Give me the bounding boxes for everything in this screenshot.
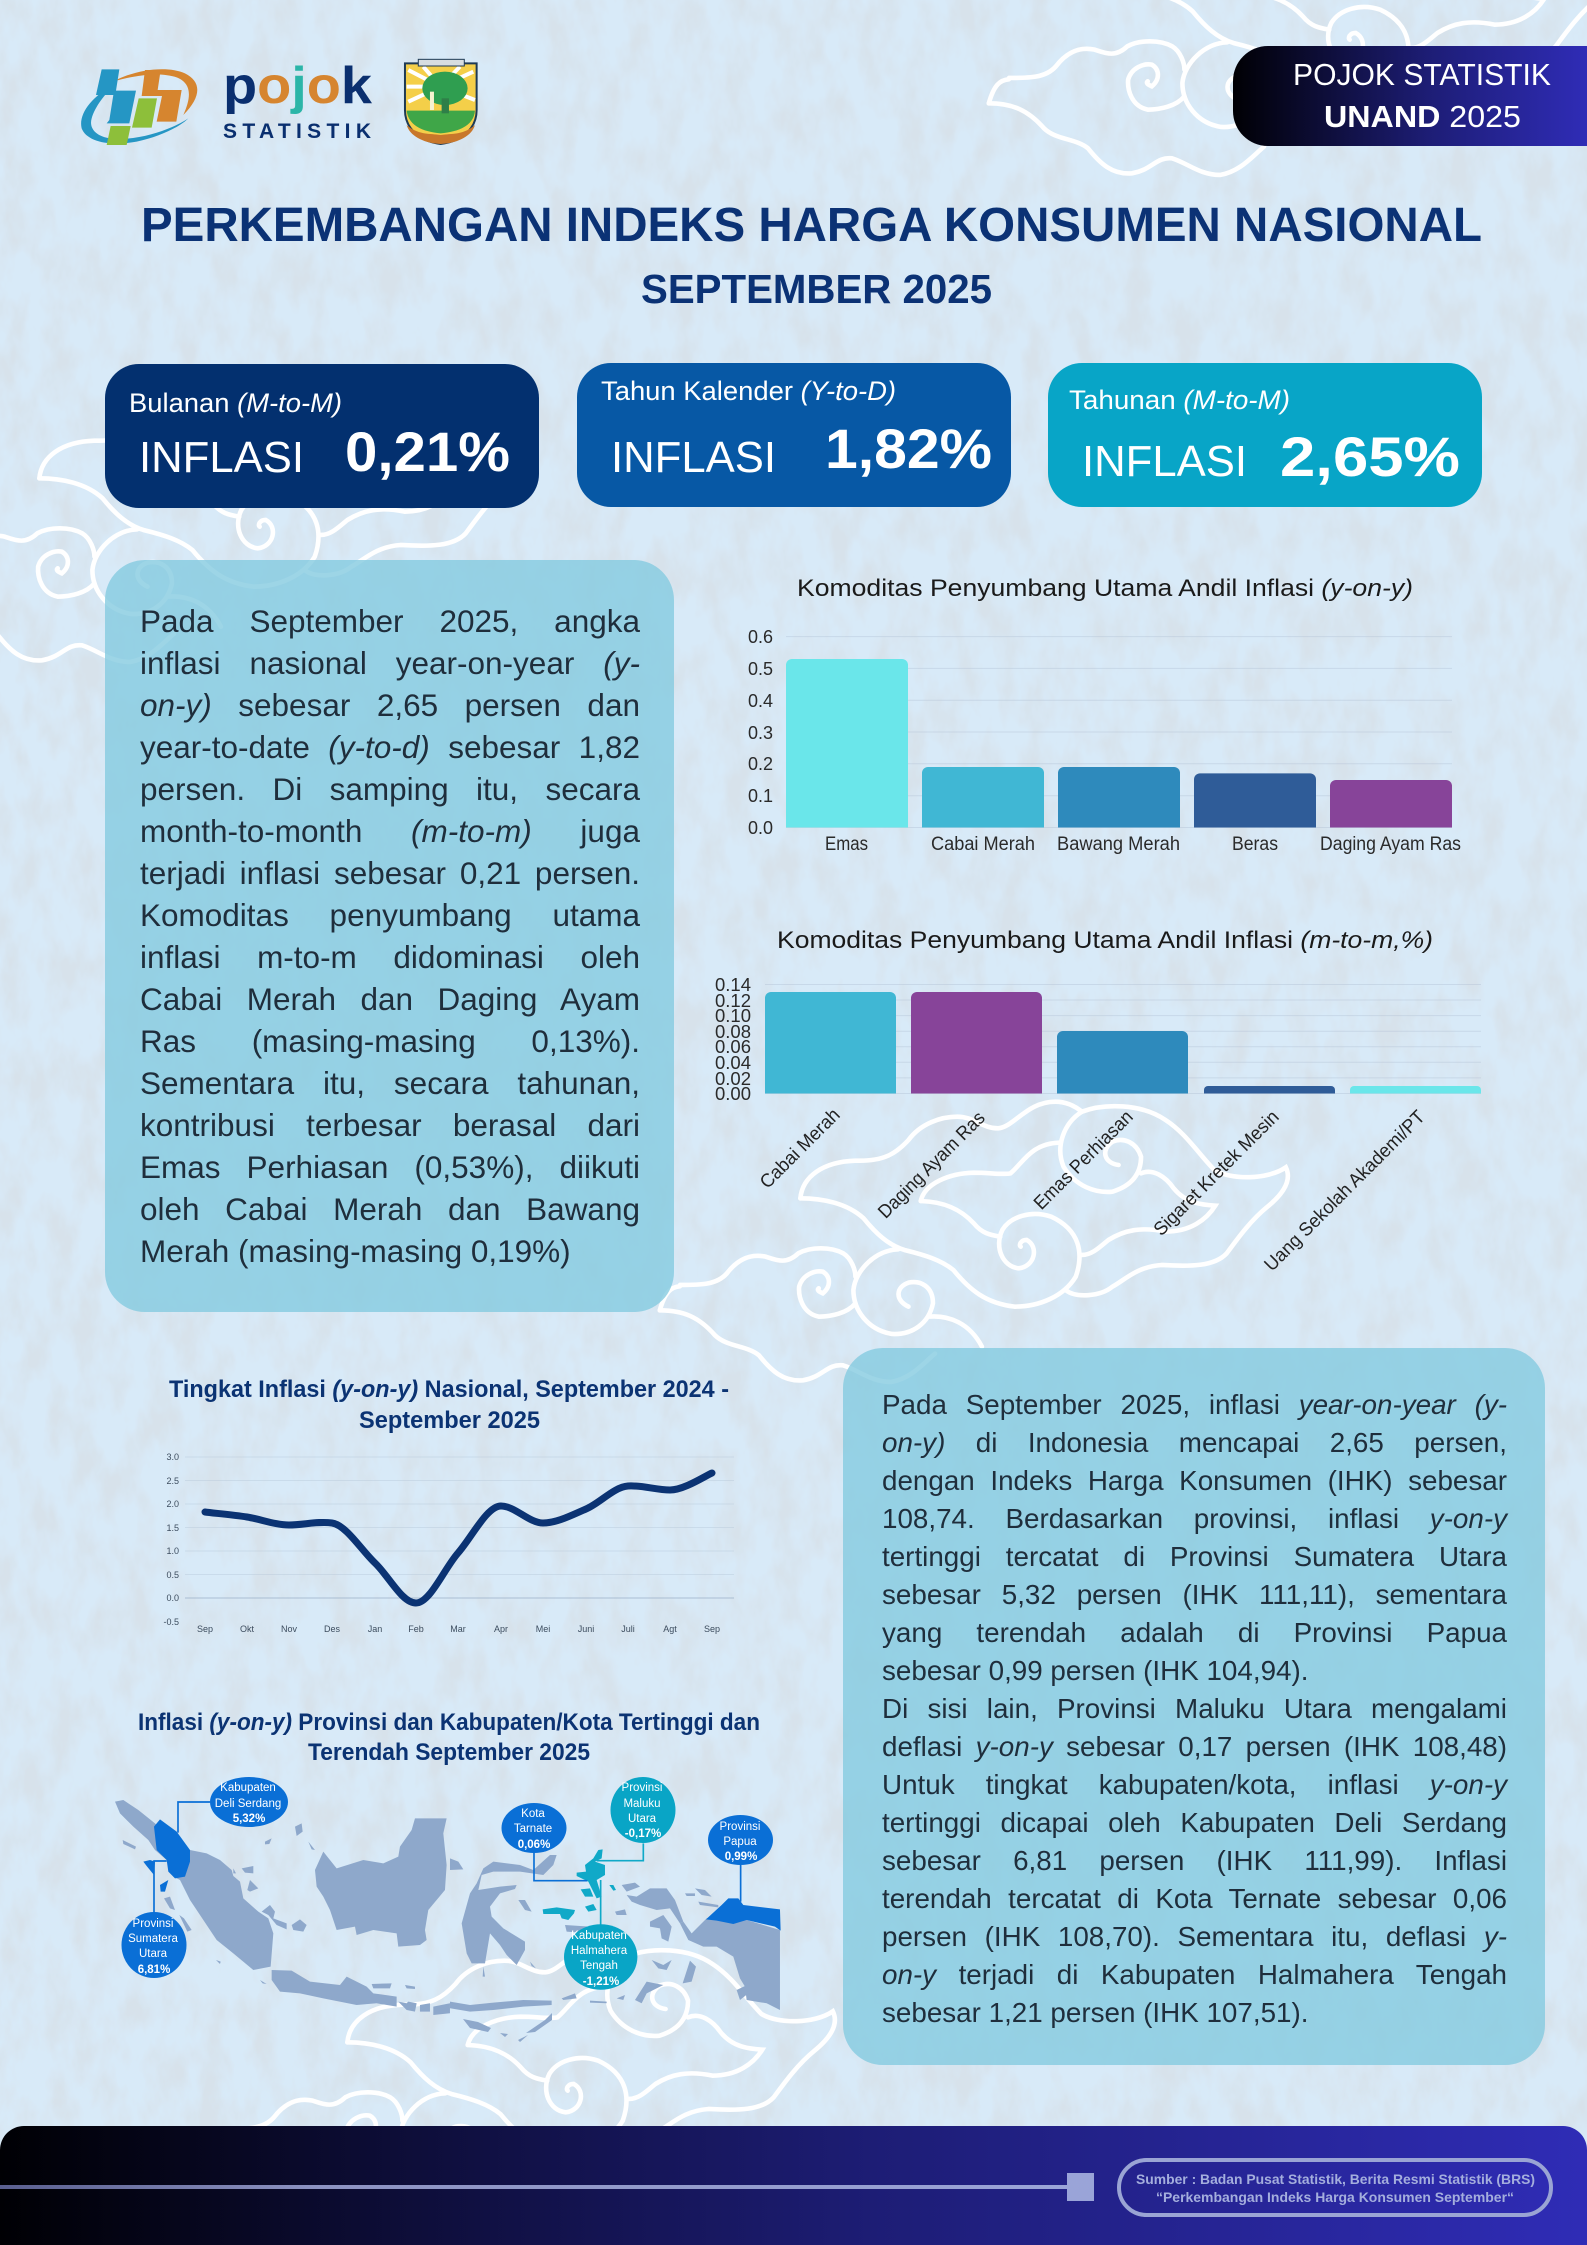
text block: national inflation summary: Komoditas penyumbang utama — [140, 897, 640, 933]
text block: provincial inflation summary: Di sisi lain, Provinsi Maluku Utara mengalami — [882, 1693, 1507, 1724]
map: Indonesia — [115, 1777, 781, 2042]
line chart: national y-on-y inflation: Agt — [663, 1624, 677, 1634]
text block: provincial inflation summary: tertinggi tercatat di Provinsi Sumatera Utara — [882, 1541, 1507, 1572]
bar chart: commodities m-to-m: 0.00 — [715, 1083, 751, 1104]
text block: provincial inflation summary: on-y) di Indonesia mencapai 2,65 persen, — [882, 1427, 1507, 1458]
text block: national inflation summary: persen. Di samping itu, secara — [140, 771, 640, 807]
line chart: national y-on-y inflation: Sep — [704, 1624, 720, 1634]
card: annual inflation — [1048, 363, 1482, 507]
bar chart: commodities y-on-y: 0.2 — [748, 754, 773, 774]
title: PERKEMBANGAN INDEKS HARGA KONSUMEN NASIONAL — [141, 199, 1482, 252]
line chart: national y-on-y inflation: 3.0 — [166, 1452, 179, 1462]
logo: pojok statistik: pojok — [223, 57, 372, 115]
bar chart: commodities y-on-y: 0.1 — [748, 786, 773, 806]
callout: Kota Ternate: Tarnate — [514, 1823, 552, 1835]
bar chart: commodities m-to-m: Uang Sekolah Akademi/PT — [1261, 1106, 1430, 1276]
bar chart: commodities m-to-m: Emas Perhiasan — [1030, 1107, 1138, 1214]
card: monthly inflation: 0,21% — [345, 420, 510, 483]
logo: pojok statistik — [223, 57, 372, 143]
text block: national inflation summary: inflasi m-to-m didominasi oleh — [140, 939, 640, 975]
logo: regional emblem — [405, 59, 477, 144]
text block: provincial inflation summary: sebesar 5,32 persen (IHK 111,11), sementara — [882, 1579, 1507, 1610]
bar chart: commodities m-to-m: 0.04 — [715, 1052, 751, 1073]
chart title: Komoditas Penyumbang Utama Andil Inflasi (y-on-y) — [797, 575, 1413, 602]
callout: Deli Serdang — [210, 1777, 288, 1827]
callout: Maluku Utara: Provinsi — [622, 1782, 662, 1794]
callout: Maluku Utara — [610, 1777, 676, 1843]
text block: national inflation summary: Merah (masing-masing 0,19%) — [140, 1233, 571, 1269]
callout: Deli Serdang: Deli Serdang — [215, 1798, 281, 1810]
callout: Halmahera Tengah — [564, 1924, 637, 1990]
line chart: national y-on-y inflation: 2.5 — [166, 1476, 179, 1486]
footer band — [0, 2126, 1587, 2245]
bar chart: commodities y-on-y: 0.4 — [748, 691, 773, 711]
bar chart: commodities m-to-m — [715, 927, 1481, 1276]
line chart: national y-on-y inflation: Nov — [281, 1624, 297, 1634]
source note: “Perkembangan Indeks Harga Konsumen September“ — [1156, 2189, 1514, 2205]
map title — [138, 1709, 760, 1766]
bar chart: commodities y-on-y: Emas — [825, 834, 868, 855]
bar chart: commodities y-on-y: 0.5 — [748, 659, 773, 679]
panel: right narrative text — [843, 1348, 1545, 2065]
text block: provincial inflation summary: Untuk tingkat kabupaten/kota, inflasi y-on-y — [882, 1769, 1507, 1800]
bar chart: commodities y-on-y: 0.3 — [748, 723, 773, 743]
callout: Deli Serdang: Kabupaten — [220, 1782, 276, 1794]
logo: BPS — [81, 69, 197, 145]
callout: Maluku Utara: -0,17% — [625, 1828, 661, 1840]
bar chart: commodities m-to-m: 0.14 — [715, 974, 751, 995]
text block: provincial inflation summary: sebesar 0,99 persen (IHK 104,94). — [882, 1655, 1308, 1686]
card: annual inflation: INFLASI — [1082, 437, 1247, 486]
text block: provincial inflation summary: dengan Indeks Harga Konsumen (IHK) sebesar — [882, 1465, 1507, 1496]
line chart: national y-on-y inflation: Jan — [368, 1624, 382, 1634]
line chart: national y-on-y inflation: -0.5 — [163, 1617, 179, 1627]
line chart: national y-on-y inflation: Feb — [408, 1624, 424, 1634]
badge: pojok statistik unand 2025: UNAND 2025 — [1324, 99, 1521, 134]
callout: Sumatera Utara — [122, 1912, 186, 1978]
text block: provincial inflation summary: sebesar 1,21 persen (IHK 107,51). — [882, 1997, 1308, 2028]
map title: Terendah September 2025 — [308, 1739, 590, 1766]
callout: Deli Serdang: 5,32% — [233, 1813, 265, 1825]
text block: national inflation summary — [140, 603, 640, 1269]
callout: Halmahera Tengah: -1,21% — [583, 1976, 619, 1988]
text block: provincial inflation summary: yang terendah adalah di Provinsi Papua — [882, 1617, 1507, 1648]
text block: national inflation summary: on-y) sebesar 2,65 persen dan — [140, 687, 640, 723]
text block: national inflation summary: kontribusi terbesar berasal dari — [140, 1107, 640, 1143]
text block: provincial inflation summary: sebesar 6,81 persen (IHK 111,99). Inflasi — [882, 1845, 1507, 1876]
bar chart: commodities y-on-y: Bawang Merah — [1057, 834, 1180, 855]
map: southern islands — [463, 2013, 552, 2042]
callout: Sumatera Utara: Sumatera — [128, 1933, 179, 1945]
subtitle: SEPTEMBER 2025 — [641, 266, 992, 312]
line chart: national y-on-y inflation: Sep — [197, 1624, 213, 1634]
line chart: national y-on-y inflation: Juni — [578, 1624, 594, 1634]
bar chart: commodities m-to-m: 0.08 — [715, 1021, 751, 1042]
callout: Kota Ternate — [502, 1803, 566, 1853]
line chart: national y-on-y inflation: Apr — [494, 1624, 508, 1634]
chart title: Komoditas Penyumbang Utama Andil Inflasi (m-to-m,%) — [777, 927, 1433, 954]
callout: Papua — [708, 1815, 773, 1865]
callout: Papua: Papua — [723, 1836, 757, 1848]
line chart: national y-on-y inflation: 0.0 — [166, 1593, 179, 1603]
logo: pojok statistik: STATISTIK — [223, 120, 371, 143]
line chart: national y-on-y inflation: Mar — [450, 1624, 466, 1634]
chart title: September 2025 — [359, 1407, 540, 1434]
line chart: national y-on-y inflation: Juli — [621, 1624, 635, 1634]
callout: Sumatera Utara: Provinsi — [133, 1918, 173, 1930]
bar chart: commodities m-to-m: Sigaret Kretek Mesin — [1150, 1107, 1284, 1240]
card: year-to-date inflation: 1,82% — [825, 417, 992, 480]
bar chart: commodities m-to-m: 0.02 — [715, 1068, 751, 1089]
card: monthly inflation: Bulanan (M-to-M) — [129, 388, 342, 418]
line chart: national y-on-y inflation — [163, 1376, 734, 1634]
line chart: national y-on-y inflation: Mei — [536, 1624, 550, 1634]
line chart: national y-on-y inflation: Des — [324, 1624, 340, 1634]
map: western islands — [115, 1800, 450, 2015]
map: eastern islands — [450, 1843, 781, 2012]
source note: Sumber : Badan Pusat Statistik, Berita Resmi Statistik (BRS) — [1136, 2171, 1535, 2187]
bar chart: commodities y-on-y: 0.0 — [748, 818, 773, 838]
text block: national inflation summary: year-to-date (y-to-d) sebesar 1,82 — [140, 729, 640, 765]
badge: pojok statistik unand 2025: POJOK STATISTIK — [1293, 57, 1551, 92]
line chart: national y-on-y inflation: 0.5 — [166, 1570, 179, 1580]
callout: Papua: 0,99% — [725, 1851, 757, 1863]
footer line and square — [0, 2173, 1094, 2201]
line chart: national y-on-y inflation: 2.0 — [166, 1499, 179, 1509]
callout: Sumatera Utara: Utara — [139, 1948, 168, 1960]
text block: national inflation summary: inflasi nasional year-on-year (y- — [140, 645, 640, 681]
chart title: Tingkat Inflasi (y-on-y) Nasional, September 2024 - — [169, 1376, 729, 1403]
card: annual inflation: 2,65% — [1280, 425, 1460, 488]
line chart: national y-on-y inflation: 1.0 — [166, 1546, 179, 1556]
text block: provincial inflation summary: terendah tercatat di Kota Ternate sebesar 0,06 — [882, 1883, 1507, 1914]
text block: national inflation summary: Emas Perhiasan (0,53%), diikuti — [140, 1149, 640, 1185]
line chart: national y-on-y inflation: 1.5 — [166, 1523, 179, 1533]
callout: Papua: Provinsi — [720, 1821, 760, 1833]
card: year-to-date inflation — [577, 363, 1011, 507]
text block: national inflation summary: Sementara itu, secara tahunan, — [140, 1065, 640, 1101]
bar chart: commodities m-to-m: 0.06 — [715, 1036, 751, 1057]
text block: provincial inflation summary: 108,74. Berdasarkan provinsi, inflasi y-on-y — [882, 1503, 1507, 1534]
text block: national inflation summary: Ras (masing-masing 0,13%). — [140, 1023, 640, 1059]
text block: provincial inflation summary: deflasi y-on-y sebesar 0,17 persen (IHK 108,48) — [882, 1731, 1507, 1762]
bar chart: commodities m-to-m: Cabai Merah — [756, 1105, 845, 1193]
text block: national inflation summary: oleh Cabai Merah dan Bawang — [140, 1191, 640, 1227]
text block: national inflation summary: month-to-month (m-to-m) juga — [140, 813, 640, 849]
panel: left narrative text — [105, 560, 674, 1312]
bar chart: commodities y-on-y: Cabai Merah — [931, 834, 1035, 855]
callout: Kota Ternate: Kota — [521, 1808, 545, 1820]
card: year-to-date inflation: INFLASI — [611, 433, 776, 482]
callout: Halmahera Tengah: Halmahera — [571, 1945, 628, 1957]
callout: Sumatera Utara: 6,81% — [138, 1964, 170, 1976]
callout: Halmahera Tengah: Kabupaten — [571, 1930, 627, 1942]
text block: national inflation summary: Pada September 2025, angka — [140, 603, 640, 639]
callout: Maluku Utara: Utara — [628, 1813, 657, 1825]
callout: Kota Ternate: 0,06% — [518, 1839, 550, 1851]
callout: Halmahera Tengah: Tengah — [580, 1960, 618, 1972]
text block: national inflation summary: Cabai Merah dan Daging Ayam — [140, 981, 640, 1017]
text block: provincial inflation summary: Pada September 2025, inflasi year-on-year (y- — [882, 1389, 1507, 1420]
text block: provincial inflation summary: tertinggi dicapai oleh Kabupaten Deli Serdang — [882, 1807, 1507, 1838]
bar chart: commodities m-to-m: Daging Ayam Ras — [874, 1108, 990, 1223]
bar chart: commodities m-to-m: 0.10 — [715, 1005, 751, 1026]
bar chart: commodities y-on-y: Daging Ayam Ras — [1320, 834, 1461, 855]
text block: national inflation summary: terjadi inflasi sebesar 0,21 persen. — [140, 855, 640, 891]
card: monthly inflation — [105, 364, 539, 508]
source note — [1119, 2160, 1551, 2215]
text block: provincial inflation summary: persen (IHK 108,70). Sementara itu, deflasi y- — [882, 1921, 1507, 1952]
line chart: national y-on-y inflation: Okt — [240, 1624, 254, 1634]
text block: provincial inflation summary: on-y terjadi di Kabupaten Halmahera Tengah — [882, 1959, 1507, 1990]
callout: Maluku Utara: Maluku — [623, 1798, 661, 1810]
card: year-to-date inflation: Tahun Kalender (Y-to-D) — [601, 376, 896, 406]
card: monthly inflation: INFLASI — [139, 433, 304, 482]
text block: provincial inflation summary — [882, 1389, 1508, 2028]
chart title — [169, 1376, 729, 1434]
bar chart: commodities y-on-y — [748, 575, 1461, 855]
card: annual inflation: Tahunan (M-to-M) — [1069, 385, 1290, 415]
map title: Inflasi (y-on-y) Provinsi dan Kabupaten/Kota Tertinggi dan — [138, 1709, 760, 1736]
bar chart: commodities y-on-y: 0.6 — [748, 627, 773, 647]
badge: pojok statistik unand 2025 — [1233, 46, 1587, 146]
bar chart: commodities m-to-m: 0.12 — [715, 990, 751, 1011]
bar chart: commodities y-on-y: Beras — [1232, 834, 1278, 855]
